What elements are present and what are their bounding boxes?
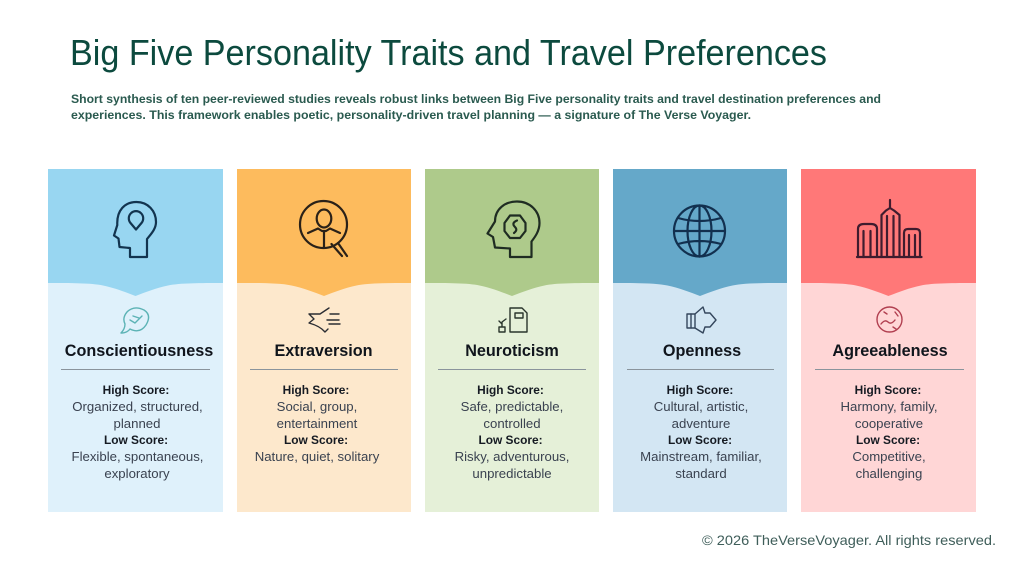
trait scores: Low Score: <box>856 433 920 447</box>
intro text: experiences. This framework enables poetic, personality-driven travel planning — a signature of The Verse Voyager. <box>71 108 751 122</box>
icon: hand megaphone <box>309 308 340 332</box>
trait scores: unpredictable <box>472 466 552 481</box>
trait scores: Organized, structured, <box>72 399 203 414</box>
header band <box>425 169 599 296</box>
header band <box>801 169 976 296</box>
heading: Neuroticism <box>465 342 559 360</box>
trait scores: Competitive, <box>852 449 926 464</box>
trait scores: adventure <box>672 416 730 431</box>
panel: Agreeableness <box>801 169 976 512</box>
trait scores: High Score: <box>103 383 169 397</box>
panel: Conscientiousness <box>48 169 223 512</box>
trait scores: challenging <box>856 466 922 481</box>
title: Big Five Personality Traits and Travel Preferences <box>70 32 827 73</box>
trait scores: planned <box>114 416 160 431</box>
header band <box>237 169 411 296</box>
trait scores: High Score: <box>855 383 921 397</box>
trait scores: Low Score: <box>104 433 168 447</box>
trait scores: entertainment <box>277 416 358 431</box>
trait scores: controlled <box>483 416 541 431</box>
panel: Neuroticism <box>425 169 599 512</box>
icon: speech bubble check <box>121 308 149 333</box>
icon: speaker <box>687 307 716 333</box>
intro text <box>71 92 881 122</box>
icon: document with plant <box>499 308 527 332</box>
icon: person in magnifier <box>300 201 347 256</box>
heading: Extraversion <box>274 342 373 360</box>
trait scores: standard <box>675 466 727 481</box>
icon: city towers <box>857 200 922 257</box>
trait scores: Low Score: <box>478 433 543 447</box>
trait scores: Risky, adventurous, <box>455 449 569 464</box>
trait scores: Social, group, <box>277 399 357 414</box>
panel: Extraversion <box>237 169 411 512</box>
trait scores: Harmony, family, <box>841 399 937 414</box>
trait scores: Mainstream, familiar, <box>640 449 762 464</box>
trait scores: Low Score: <box>284 433 348 447</box>
header band <box>48 169 223 296</box>
heading: Agreeableness <box>832 342 948 360</box>
heading: Conscientiousness <box>65 342 213 360</box>
trait scores: Low Score: <box>668 433 732 447</box>
trait scores <box>841 383 937 481</box>
intro text: Short synthesis of ten peer-reviewed studies reveals robust links between Big Five personality traits and travel destination preferences and <box>71 92 881 106</box>
icon: head with brain <box>488 202 540 257</box>
trait scores <box>72 383 203 481</box>
trait scores: cooperative <box>855 416 923 431</box>
trait scores <box>255 383 380 464</box>
header band <box>613 169 787 296</box>
trait scores: Flexible, spontaneous, <box>72 449 203 464</box>
icon: round globe with squiggles <box>877 307 902 332</box>
trait scores: High Score: <box>477 383 544 397</box>
trait scores: Cultural, artistic, <box>654 399 748 414</box>
trait scores <box>640 383 762 481</box>
trait scores: Safe, predictable, <box>461 399 563 414</box>
trait scores: exploratory <box>104 466 170 481</box>
trait scores <box>455 383 569 481</box>
copyright footer: © 2026 TheVerseVoyager. All rights reserved. <box>702 532 996 548</box>
icon: head with location pin <box>114 202 156 257</box>
icon: globe <box>674 206 725 256</box>
panel: Openness <box>613 169 787 512</box>
heading: Openness <box>663 342 741 360</box>
trait scores: Nature, quiet, solitary <box>255 449 380 464</box>
trait scores: High Score: <box>283 383 349 397</box>
trait scores: High Score: <box>667 383 733 397</box>
